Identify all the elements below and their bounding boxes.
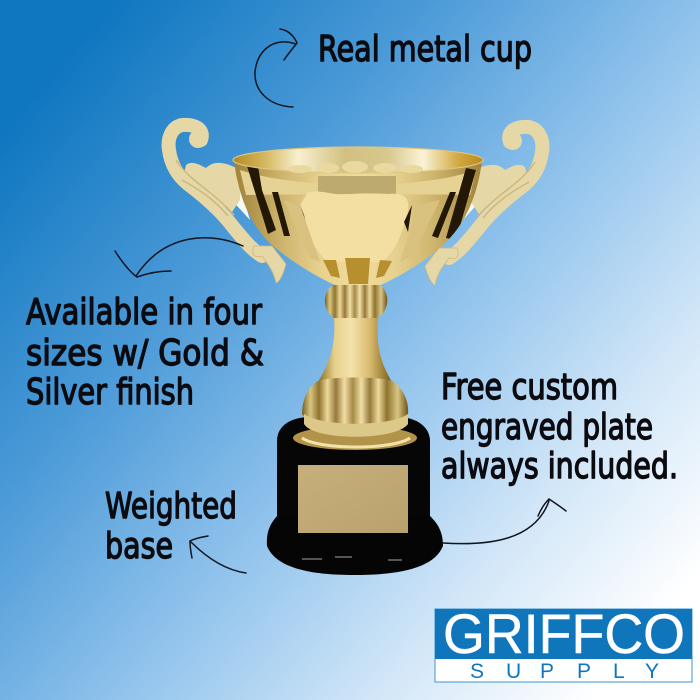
gold collar highlights [302, 438, 410, 447]
label: free engraved plate: Free custom [441, 367, 618, 408]
label: weighted base: base [105, 526, 173, 567]
black base body [277, 417, 430, 530]
left handle [169, 125, 286, 283]
label: sizes and finish [26, 292, 264, 413]
arrow to cup [255, 29, 297, 107]
stem [318, 316, 392, 382]
gold collar [293, 426, 417, 450]
fluted dome [302, 378, 408, 426]
arrow to bowl [115, 238, 243, 277]
label: sizes and finish: sizes w/ Gold & [26, 333, 264, 374]
cup rim interior [233, 147, 483, 173]
label: sizes and finish: Available in four [26, 292, 262, 333]
cup bowl [234, 160, 482, 285]
label: weighted base [105, 486, 237, 567]
label: free engraved plate [441, 367, 678, 487]
trophy photo [169, 125, 542, 575]
dome lower band [304, 414, 408, 437]
rim bumps [288, 161, 423, 173]
stem knob [325, 285, 387, 318]
logo: Griffco Supply: SUPPLY [470, 660, 659, 683]
base highlights [302, 557, 402, 560]
engraved plate [298, 465, 408, 533]
label: sizes and finish: Silver finish [26, 372, 194, 413]
label: weighted base: Weighted [105, 486, 237, 527]
logo: Griffco Supply: GRIFFCO [443, 602, 685, 665]
bowl flutes [240, 166, 476, 284]
label: real metal cup: Real metal cup [318, 29, 532, 70]
arrow to plate [443, 499, 566, 544]
right handle [425, 127, 542, 285]
black base foot [267, 516, 443, 575]
arrow to base [190, 536, 246, 573]
